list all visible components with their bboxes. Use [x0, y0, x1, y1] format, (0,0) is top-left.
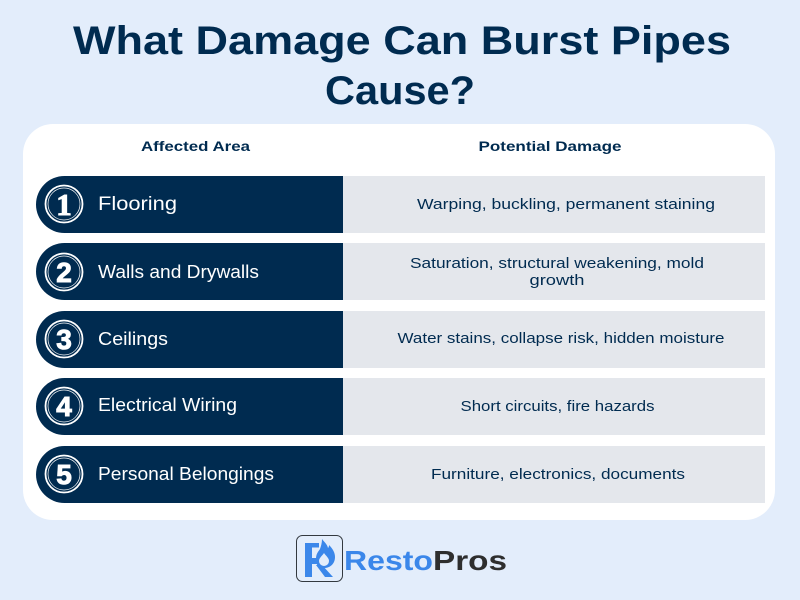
row 3: ceilings: Ceilings — [98, 328, 168, 349]
row 2: walls and drywalls: Saturation, structural weakening, mold — [410, 255, 704, 272]
row 4: electrical wiring: Short circuits, fire hazards — [460, 398, 654, 415]
logo: RestoPros — [296, 536, 507, 582]
title: What Damage Can Burst Pipes — [73, 19, 731, 63]
row 2: walls and drywalls — [36, 243, 765, 300]
row 1: flooring — [36, 176, 765, 233]
wordmark: Resto: Resto — [344, 545, 433, 576]
row 2: walls and drywalls: Walls and Drywalls — [98, 261, 259, 282]
wordmark: Pros: Pros — [433, 545, 507, 576]
row 3: ceilings: 3 — [56, 324, 72, 355]
row 4: electrical wiring: 4 — [56, 391, 72, 422]
row 4: electrical wiring — [36, 378, 765, 435]
row 1: flooring: Warping, buckling, permanent staining — [417, 196, 715, 213]
row 5: personal belongings: Furniture, electronics, documents — [431, 466, 685, 483]
row 2: walls and drywalls: 2 — [56, 257, 72, 288]
row 3: ceilings: Water stains, collapse risk, hidden moisture — [398, 330, 724, 347]
panel: damage table — [23, 124, 775, 520]
column heading: affected area: Affected Area — [141, 138, 250, 154]
column heading: potential damage: Potential Damage — [478, 138, 622, 154]
icon: R with flame and water drop — [296, 536, 342, 582]
row 4: electrical wiring: Electrical Wiring — [98, 394, 237, 415]
row 2: walls and drywalls: growth — [530, 272, 584, 289]
row 1: flooring: Flooring — [98, 194, 177, 215]
title: Cause? — [325, 69, 475, 113]
title — [73, 19, 731, 113]
row 5: personal belongings: Personal Belongings — [98, 463, 274, 484]
row 1: flooring: 1 — [56, 187, 72, 222]
row 5: personal belongings — [36, 446, 765, 503]
row 5: personal belongings: 5 — [56, 459, 72, 490]
row 3: ceilings — [36, 311, 765, 368]
